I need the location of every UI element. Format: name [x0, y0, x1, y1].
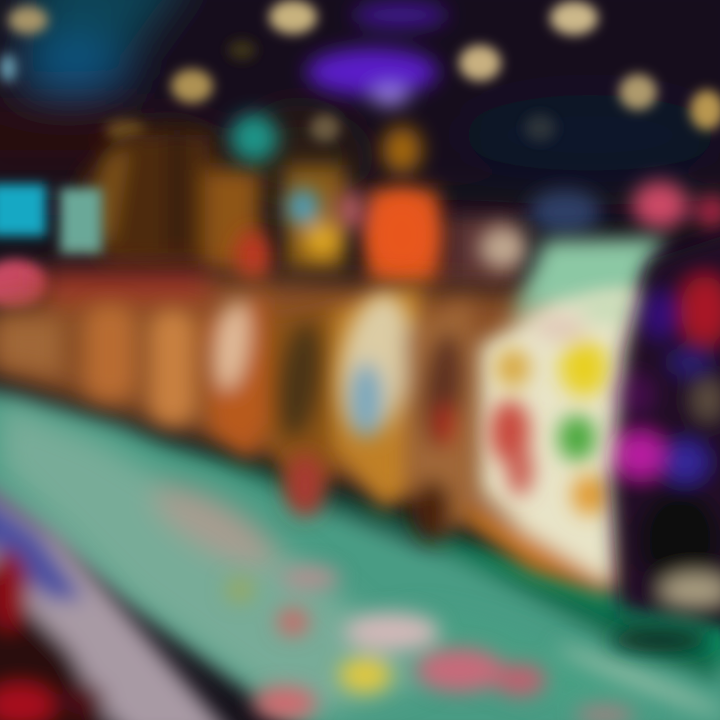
machine tops	[80, 126, 518, 285]
ceiling lights	[0, 0, 720, 142]
large foreground reel	[465, 238, 665, 595]
slot machine reels	[0, 285, 420, 510]
right dark chip stack	[610, 230, 720, 652]
felt table	[0, 385, 720, 720]
left lower strip and dark red	[0, 480, 235, 720]
table chips	[226, 566, 720, 720]
reel symbols	[490, 296, 640, 515]
ceiling backdrop	[0, 0, 720, 250]
left screens	[0, 184, 102, 311]
felt highlights	[0, 400, 650, 720]
purple ceiling glow	[306, 1, 448, 106]
machine band	[0, 270, 660, 600]
